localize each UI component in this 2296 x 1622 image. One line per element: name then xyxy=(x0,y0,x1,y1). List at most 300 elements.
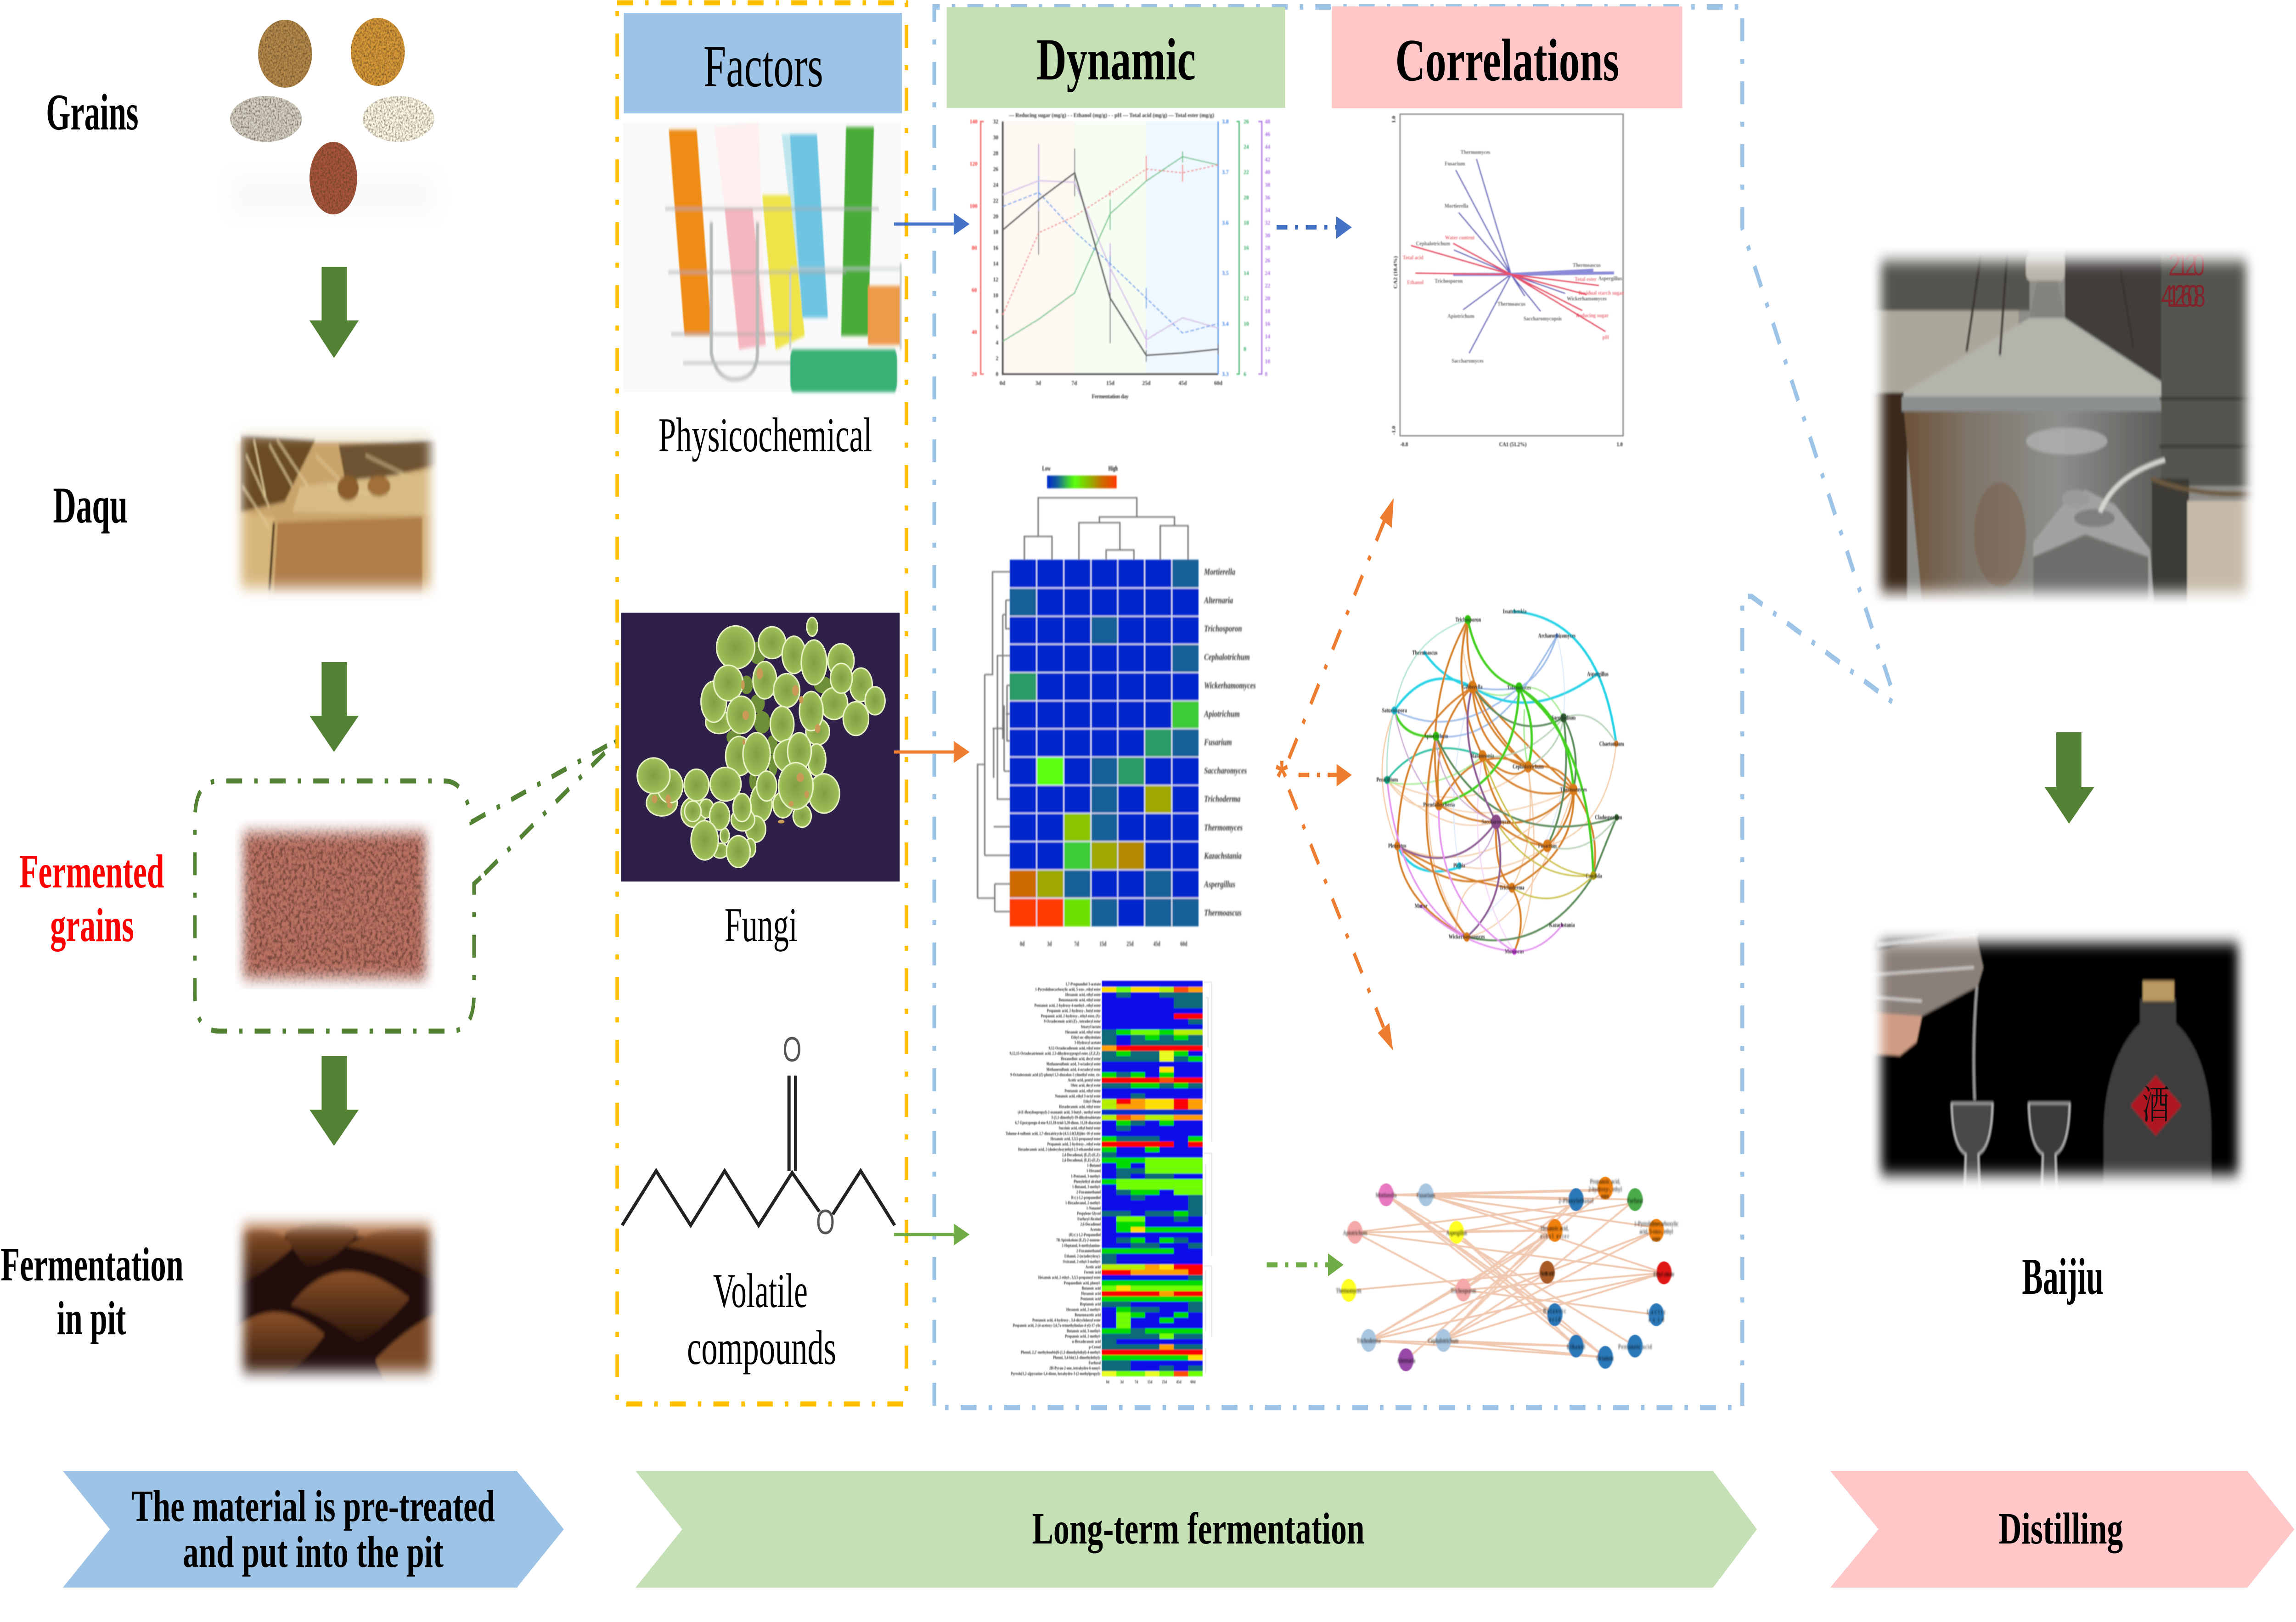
row labels: fungal genera: Mortierella xyxy=(1204,567,1235,577)
axis labels: ethanol: 80 xyxy=(972,245,977,251)
labels: vectors: Saccharomyces xyxy=(1452,358,1484,364)
axis labels: total acid xyxy=(1244,118,1249,377)
chart: volatile compounds heatmap: Pentanoic acid, 2-hydroxy-4-methyl-, ethyl ester xyxy=(1035,1003,1101,1008)
axis labels: pH: 3.6 xyxy=(1222,219,1229,226)
chart: volatile compounds heatmap: 1-Hexadecanol, 2-methyl- xyxy=(1065,1200,1101,1205)
chart: volatile compounds heatmap: Hexanoic acid, 2-ethyl-, 3,3,5-propanoyl ester xyxy=(1038,1274,1101,1280)
arrow: fungi to heatmap xyxy=(894,741,969,763)
chart: volatile compounds heatmap: 1-Hexanol xyxy=(1086,1168,1101,1173)
column labels: days: 7d xyxy=(1135,1379,1138,1385)
row labels: fungal genera: Apiotrichum xyxy=(1204,709,1240,719)
icon: ethyl hexanoate molecule: O xyxy=(783,1030,801,1069)
label: pipe serial digits: 2120 xyxy=(2168,248,2205,282)
axis labels: reducing sugar: 0 xyxy=(996,371,998,377)
heatmap cells xyxy=(1010,560,1199,926)
labels: vectors: CA2 (18.4%) xyxy=(1393,256,1398,289)
panel: raw material process column xyxy=(0,18,618,1386)
labels: vectors: Trichosporon xyxy=(1435,278,1463,284)
column labels: days: 60d xyxy=(1180,940,1187,948)
chart: volatile compounds heatmap: Stearyl lactate xyxy=(1081,1024,1101,1029)
chart: volatile compounds heatmap: 9-Octadecenoic acid (Z)-phenyl 1,3-dioxolan-2-ylmethyl ester, cis- xyxy=(1010,1072,1101,1077)
legend: low to high colour bar xyxy=(1042,465,1118,488)
chart: volatile compounds heatmap: Propanedioic acid, phenyl- xyxy=(1064,1280,1101,1285)
node labels xyxy=(1336,1178,1679,1364)
node labels: Trichoderma xyxy=(1356,1337,1381,1344)
axis labels: pH: 3.5 xyxy=(1222,270,1229,276)
node labels: Fusarium xyxy=(1538,842,1557,849)
chart: volatile compounds heatmap: Methanesulfonic acid, 3-octadecyl ester xyxy=(1047,1061,1101,1066)
row labels: fungal genera: Aspergillus xyxy=(1204,879,1235,889)
node labels: Kazachstania xyxy=(1549,921,1575,929)
axis labels: total ester: 22 xyxy=(1265,282,1270,289)
node labels: Alternaria xyxy=(1397,1357,1415,1364)
chart: volatile compounds heatmap: Succinic acid, ethyl butyl ester xyxy=(1059,1125,1101,1130)
chart: volatile compounds heatmap: Pyrrolo[1,2-a]pyrazine-1,4-dione, hexahydro-3-(2-methylpropyl)- xyxy=(1011,1371,1101,1376)
chart: volatile compounds heatmap: Furfural xyxy=(1089,1360,1101,1365)
axis labels: ethanol: 40 xyxy=(972,329,977,335)
labels: vectors: -1.0 xyxy=(1391,426,1396,435)
axis labels: total ester: 16 xyxy=(1265,320,1270,327)
panel: distilling xyxy=(1870,247,2256,1305)
frame: dynamics and correlations dash-dot border xyxy=(934,7,1898,1408)
axis labels: total ester: 10 xyxy=(1265,358,1270,365)
node labels: Aspergillus xyxy=(1587,670,1609,678)
environmental vectors xyxy=(1411,243,1606,331)
chart: volatile compounds heatmap: 2-Furanmethanol xyxy=(1076,1248,1101,1253)
chart: volatile compounds heatmap: 1-Pentanol, 3-methyl- xyxy=(1071,1173,1101,1179)
chart: volatile compounds heatmap: Acetic acid xyxy=(1086,1264,1101,1269)
x axis labels: Fermentation day xyxy=(1092,393,1129,400)
x axis labels: 60d xyxy=(1214,380,1222,386)
image: fermentation pit xyxy=(233,1210,440,1386)
chart: volatile compounds heatmap: Hexadecanoic acid, ethyl ester xyxy=(1059,1104,1101,1109)
chart: volatile compounds heatmap: p-Cresol xyxy=(1089,1344,1101,1349)
label: pipe serial digits xyxy=(2161,248,2206,314)
image: test tubes xyxy=(623,123,901,392)
axis labels: reducing sugar: 6 xyxy=(996,324,998,331)
stage banner: pre-treatment: The material is pre-treated xyxy=(132,1482,495,1531)
chart: volatile compounds heatmap: (4-E-Hexylisopropyl)-2-oxonanic acid, 3-butyl-, methyl ester xyxy=(1018,1109,1101,1115)
axis labels: total acid: 8 xyxy=(1244,346,1246,352)
node labels: Cladosporium xyxy=(1595,814,1622,821)
column labels: days: 25d xyxy=(1162,1379,1167,1385)
chart: volatile compounds heatmap: 2H-Pyran-2-one, tetrahydro-6-nonyl- xyxy=(1049,1365,1101,1371)
chart: volatile compounds heatmap: 2,6-Decadienol xyxy=(1080,1221,1101,1227)
chart: volatile compounds heatmap: 1-Pyrrolidinecarboxylic acid, 5-oxo-, ethyl ester xyxy=(1035,987,1101,992)
chart: volatile compounds heatmap: 2,4-Decadienal, (E,E)-(E,Z)- xyxy=(1062,1157,1101,1162)
axis labels: reducing sugar: 24 xyxy=(993,181,998,188)
arrow: line chart to biplot xyxy=(1277,216,1352,239)
image: fermented grains xyxy=(235,819,435,989)
axis labels: pH xyxy=(1222,118,1229,377)
heading: Dynamic xyxy=(947,7,1285,108)
label: Fermented grains: Fermented xyxy=(19,845,164,898)
axis labels: ethanol: 120 xyxy=(970,161,978,167)
chart: volatile compounds heatmap: 9,12-Octadecadienoic acid, ethyl ester xyxy=(1049,1045,1101,1050)
labels: vectors: Thermoascus xyxy=(1573,262,1601,269)
arrow: physicochemical to line chart xyxy=(894,213,969,235)
axis labels: pH: 3.7 xyxy=(1222,168,1229,175)
node labels: Ethanol xyxy=(1567,1343,1585,1350)
legend: low to high colour bar: High xyxy=(1109,465,1118,472)
labels: vectors: pH xyxy=(1603,334,1609,341)
node labels: Butanoic xyxy=(1543,1307,1566,1314)
label: Volatile compounds: Volatile xyxy=(713,1264,808,1318)
labels: vectors: Cephalotrichum xyxy=(1416,241,1450,247)
arrow: fermented grains to pit xyxy=(310,1056,359,1146)
label: Physicochemical: Physicochemical xyxy=(658,408,872,462)
chart: volatile compounds heatmap: Oxiranol, 2-ethyl-3-methyl- xyxy=(1063,1259,1101,1264)
column labels: days: 0d xyxy=(1106,1379,1109,1385)
labels: vectors: Wickerhamomyces xyxy=(1567,296,1607,302)
labels: vectors xyxy=(1391,116,1624,448)
axis labels: pH: 3.3 xyxy=(1222,371,1229,377)
chart: volatile compounds heatmap: Acetic acid, pentyl ester xyxy=(1068,1077,1101,1083)
chart legend: — Reducing sugar (mg/g) - - Ethanol (mg/g) - - pH — Total acid (mg/g) — Total ester (mg/g) xyxy=(1008,112,1214,118)
node labels: Apiotrichum xyxy=(1343,1229,1367,1236)
node labels: acid xyxy=(1649,1316,1665,1323)
chart: volatile compounds heatmap: Acetoin xyxy=(1090,1227,1101,1232)
chart: fungi heatmap xyxy=(978,465,1256,948)
axis labels: total ester: 40 xyxy=(1265,168,1270,175)
node labels: Furfural xyxy=(1627,1197,1643,1204)
x axis labels: 25d xyxy=(1142,380,1151,386)
edges xyxy=(1349,1190,1664,1360)
node labels: Trichoderma xyxy=(1499,884,1525,891)
chart: volatile compounds heatmap: Butanoic acid xyxy=(1082,1285,1101,1291)
arrows: fungi correlations fan-out: * xyxy=(1276,751,1288,803)
x axis labels xyxy=(1000,380,1222,400)
chart: volatile compounds heatmap: Propanoic acid, 2-hydroxy-, ethyl ester, (S)- xyxy=(1041,1013,1101,1018)
chart: volatile compounds heatmap: Methanesulfonic acid, 4-octadecyl ester xyxy=(1047,1066,1101,1072)
column labels: days: 45d xyxy=(1154,940,1160,948)
node labels: ester xyxy=(1652,1235,1660,1242)
node labels: Candida xyxy=(1586,872,1602,879)
column labels: days: 45d xyxy=(1176,1379,1182,1385)
arrow: grains to daqu xyxy=(310,267,359,358)
chart: volatile compounds heatmap: Heptanoic acid xyxy=(1080,1302,1101,1307)
node labels: Cephalotrichum xyxy=(1513,763,1544,770)
node labels: Ethyl oleate xyxy=(1654,1270,1675,1278)
labels: vectors: Thermomyces xyxy=(1461,149,1491,156)
axis labels: reducing sugar: 4 xyxy=(996,339,998,346)
axis labels: total ester: 34 xyxy=(1265,207,1270,213)
chart: volatile compounds heatmap: 3-Hydroxyl acetate xyxy=(1075,1040,1101,1045)
chart: volatile compounds heatmap: Propanoic acid, 2-hydroxy-, ethyl ester xyxy=(1047,1141,1101,1146)
row labels: fungal genera: Saccharomyces xyxy=(1204,765,1247,776)
chart: volatile compounds heatmap: 3-(1,1-dimethyl)-19-dihydroabietate xyxy=(1051,1115,1101,1120)
network edges xyxy=(1382,612,1617,952)
node labels: ethyl ester xyxy=(1541,1232,1569,1240)
chart: volatile compounds heatmap: Toluene-4-sulfonic acid, 2,7-dioxatricyclo-[4.3.1.0(3,8)]dec-10-yl ester xyxy=(1006,1131,1101,1136)
node labels: Hexanoic acid, xyxy=(1541,1224,1569,1232)
label: Grains: Grains xyxy=(46,84,138,140)
labels: vectors: 1.0 xyxy=(1391,116,1396,123)
chart: volatile compounds heatmap: Benzeneacetic acid xyxy=(1075,1312,1101,1317)
axis labels: reducing sugar: 2 xyxy=(996,355,998,362)
node labels: ester xyxy=(1601,1192,1609,1200)
axis labels: reducing sugar: 12 xyxy=(993,276,998,283)
chart: volatile compounds heatmap: Nonanoic acid, ethyl 3-octyl ester xyxy=(1055,1093,1101,1099)
arrow: still to baijiu xyxy=(2044,732,2094,824)
chart: volatile compounds heatmap: Pentanoic acid, 4-hydroxy-, 3,4-dicyclohexyl ester xyxy=(1032,1318,1101,1323)
node labels: Monascus xyxy=(1505,948,1524,955)
arrow: volatile compounds to heatmap xyxy=(894,1224,969,1246)
axis labels: total ester: 26 xyxy=(1265,257,1270,264)
network nodes xyxy=(1384,610,1619,955)
axis labels: total acid: 26 xyxy=(1244,118,1249,125)
chart: volatile compounds heatmap: 9,12,15-Octadecatrienoic acid, 2,3-dihydroxypropyl ester, (Z,Z,Z)- xyxy=(1010,1050,1101,1056)
label: Fungi: Fungi xyxy=(725,898,798,952)
chart: volatile compounds heatmap: Ethyl Oleate xyxy=(1083,1099,1101,1104)
axis labels: total ester: 48 xyxy=(1265,118,1270,125)
column labels: days: 7d xyxy=(1074,940,1079,948)
row labels: fungal genera: Trichoderma xyxy=(1204,794,1240,804)
chart: volatile compounds heatmap: Propylene Glycol xyxy=(1077,1211,1101,1216)
chart: volatile compounds heatmap: Phenol, 3,4-bis(1,1-dimethylethyl)- xyxy=(1053,1355,1101,1360)
axis labels: reducing sugar xyxy=(993,118,998,377)
labels: vectors: -0.8 xyxy=(1400,441,1408,448)
chart: volatile compounds heatmap: Hexanedioic acid, decyl ester xyxy=(1061,1056,1101,1061)
label: bottle character: 酒 xyxy=(2142,1083,2169,1127)
node labels: Aspergillus xyxy=(1446,1229,1467,1236)
axis labels: reducing sugar: 10 xyxy=(993,292,998,299)
chart: fungi and volatile bipartite network xyxy=(1336,1177,1679,1371)
row labels: fungal genera: Thermoascus xyxy=(1204,908,1242,918)
arrow: volatile heatmap to compound network xyxy=(1267,1253,1344,1276)
node labels: Wickerhamomyces xyxy=(1449,933,1485,940)
node labels: Lactic xyxy=(1647,1308,1666,1315)
axis labels: reducing sugar: 18 xyxy=(993,229,998,236)
axis labels: pH: 3.4 xyxy=(1222,320,1229,327)
node labels: Cephalotrichum xyxy=(1428,1337,1458,1344)
axis labels: reducing sugar: 30 xyxy=(993,134,998,141)
column labels: days: 15d xyxy=(1147,1379,1153,1385)
icon: ethyl hexanoate molecule xyxy=(622,1030,895,1241)
node labels: Rasamsonia xyxy=(1471,752,1494,759)
axis labels: total ester: 20 xyxy=(1265,295,1270,302)
node labels: Thermomyces xyxy=(1560,786,1587,793)
species vectors xyxy=(1453,159,1614,353)
axis labels: total acid: 10 xyxy=(1244,320,1249,327)
chart: volatile compounds heatmap: Hexanoic acid, ethyl ester xyxy=(1065,992,1101,997)
node labels: Gibberella xyxy=(1462,683,1482,690)
row labels: fungal genera: Alternaria xyxy=(1204,595,1233,605)
chart: volatile compounds heatmap: Hexanoic acid, 2-methyl- xyxy=(1066,1307,1101,1312)
axis labels: total ester xyxy=(1265,118,1270,377)
column labels: days: 3d xyxy=(1120,1379,1124,1385)
chart: volatile compounds heatmap: 9-Octadecenoic acid (Z)-, tetradecyl ester xyxy=(1044,1019,1101,1024)
column labels: days xyxy=(1020,940,1187,948)
chart: volatile compounds heatmap: Hexadecanoic acid, 2-(dodecyloxy)ethyl-2,3-ethanediol ester xyxy=(1018,1147,1101,1152)
column labels: days: 0d xyxy=(1020,940,1024,948)
axis labels: total ester: 24 xyxy=(1265,270,1270,276)
x axis labels: 15d xyxy=(1106,380,1114,386)
column labels: days xyxy=(1106,1379,1196,1385)
node labels: Chaetomium xyxy=(1599,740,1624,747)
heading: Correlations xyxy=(1332,6,1683,108)
labels: vectors: Total ester xyxy=(1575,276,1597,282)
node labels: Talaromyces xyxy=(1507,684,1531,691)
chart: volatile compounds heatmap: Propanoic acid, 2-(4-acetoxy-3,6,7a-trimethylindan-4-yl)-17-ylic xyxy=(1013,1323,1101,1328)
stage banner: long-term fermentation: Long-term fermentation xyxy=(1032,1504,1365,1554)
chart: volatile compounds heatmap: Phenylethyl alcohol xyxy=(1074,1179,1101,1184)
chart: volatile compounds heatmap: Propanoic acid, 2-methyl- xyxy=(1065,1333,1101,1339)
axis labels: ethanol xyxy=(970,118,978,377)
axis labels: reducing sugar: 20 xyxy=(993,213,998,219)
node labels: Octanoic xyxy=(1596,1354,1614,1362)
node labels: 1-Pyrrolidinecarboxylic xyxy=(1634,1220,1679,1227)
labels: vectors: Fusarium xyxy=(1445,161,1465,167)
node labels: Archaeorhizomyces xyxy=(1538,632,1576,639)
axis labels: total ester: 44 xyxy=(1265,144,1270,150)
axis labels: total ester: 8 xyxy=(1265,371,1267,377)
axis labels: ethanol: 100 xyxy=(970,202,978,209)
x axis labels: 45d xyxy=(1179,380,1187,386)
chart: volatile compounds heatmap: Furfuryl Alcohol xyxy=(1077,1216,1101,1221)
panel: factors xyxy=(617,3,906,1404)
heading: Dynamic: Dynamic xyxy=(1036,27,1196,93)
column labels: days: 3d xyxy=(1047,940,1052,948)
column labels: days: 15d xyxy=(1099,940,1106,948)
axis labels: total acid: 16 xyxy=(1244,245,1249,251)
chart: volatile compounds heatmap: Phenol, 2,2'-methylenebis[6-(1,1-dimethylethyl)-4-methyl- xyxy=(1021,1349,1101,1355)
node labels: Fusarium xyxy=(1417,1191,1435,1199)
node labels: Mortierella xyxy=(1376,1191,1397,1199)
label: Daqu: Daqu xyxy=(53,477,128,533)
image: five grains xyxy=(230,18,435,214)
stage banner: pre-treatment xyxy=(63,1471,564,1588)
node labels: Mucor xyxy=(1415,902,1428,909)
image: baijiu bottle and glasses xyxy=(1870,923,2252,1191)
axis labels: total ester: 28 xyxy=(1265,245,1270,251)
chart: volatile compounds heatmap: Pentanoic acid xyxy=(1080,1296,1101,1301)
labels: vectors: Thermoascus xyxy=(1497,301,1525,307)
stage banner: distilling: Distilling xyxy=(1998,1504,2123,1554)
stage banner: long-term fermentation xyxy=(636,1471,1757,1588)
label: pipe serial digits: 412608 xyxy=(2161,279,2206,314)
node labels: acid xyxy=(1549,1315,1561,1323)
chart: volatile compounds heatmap: 2-Heptanol, 6-methylamino- xyxy=(1062,1243,1101,1248)
chart: volatile compounds heatmap: Pentanoic acid, ethyl ester xyxy=(1064,1088,1101,1093)
labels: vectors: Residual starch sugar xyxy=(1579,290,1624,296)
chart: volatile compounds heatmap: Ethanol, 2-(octadecyloxy)- xyxy=(1064,1253,1101,1258)
axis labels: total ester: 30 xyxy=(1265,232,1270,239)
axis labels: reducing sugar: 16 xyxy=(993,245,998,251)
icon: ethyl hexanoate molecule: O xyxy=(816,1202,835,1241)
image: daqu straw block xyxy=(233,428,438,599)
stage banner: pre-treatment: and put into the pit xyxy=(183,1527,444,1577)
node labels: Issatchenkia xyxy=(1503,607,1526,615)
axis labels: reducing sugar: 28 xyxy=(993,150,998,157)
node labels xyxy=(1376,607,1624,955)
arrows: fungi correlations fan-out xyxy=(1276,498,1394,1050)
chart: volatile compounds heatmap: Oleic acid, decyl ester xyxy=(1071,1083,1101,1088)
axis labels: reducing sugar: 22 xyxy=(993,197,998,204)
axis labels: pH: 3.8 xyxy=(1222,118,1229,125)
node labels: Sarocladium xyxy=(1552,714,1576,721)
column labels: days: 60d xyxy=(1190,1379,1196,1385)
labels: vectors: Water content xyxy=(1445,235,1474,241)
axis labels: reducing sugar: 26 xyxy=(993,166,998,173)
node labels: Thermomyces xyxy=(1336,1287,1362,1294)
heading: Factors xyxy=(624,13,902,113)
chart: fungal co-occurrence network xyxy=(1376,607,1624,955)
chart: volatile compounds heatmap: 7R-Spiroketone (E,Z)-2-nonene- xyxy=(1056,1237,1101,1243)
labels: vectors: CA1 (51.2%) xyxy=(1499,441,1526,448)
arrow: daqu to fermented grains xyxy=(310,662,359,752)
node labels: Pichia xyxy=(1453,862,1465,869)
node labels: Trichosporon xyxy=(1451,1287,1476,1294)
chart: volatile compounds heatmap: 2,4-Decadienal, (E,Z)-(E,Z)- xyxy=(1062,1152,1101,1157)
node labels: Pleurotus xyxy=(1388,842,1407,849)
labels: vectors: Apiotrichum xyxy=(1447,313,1474,320)
node labels: Penicillium xyxy=(1376,776,1398,783)
chart: volatile compounds heatmap: Hexanoic acid xyxy=(1081,1291,1101,1296)
axis labels: total acid: 20 xyxy=(1244,194,1249,201)
axis labels: reducing sugar: 14 xyxy=(993,260,998,267)
heading: Factors: Factors xyxy=(703,34,823,100)
chart: volatile compounds heatmap: Benzenoacetic acid, ethyl ester xyxy=(1058,997,1101,1002)
chart: volatile compounds heatmap: n-Hexadecanoic acid xyxy=(1072,1339,1101,1344)
axis labels: total acid: 24 xyxy=(1244,144,1249,150)
node labels: Propanoic acid, xyxy=(1590,1178,1621,1185)
chart: volatile compounds heatmap: 2-Furanmethanol xyxy=(1076,1189,1101,1195)
dendrogram: columns and rows xyxy=(978,498,1188,912)
labels: vectors: 1.0 xyxy=(1617,441,1623,448)
label: Fermentation in pit: in pit xyxy=(57,1292,126,1345)
axis labels: total ester: 14 xyxy=(1265,333,1270,340)
chart: volatile compounds heatmap: 1-Nonanol xyxy=(1086,1205,1101,1211)
row labels: fungal genera: Wickerhamomyces xyxy=(1204,680,1256,690)
node labels: Pentanoic acid xyxy=(1618,1343,1652,1350)
chart: volatile compounds heatmap xyxy=(1006,981,1212,1385)
chart: volatile compounds heatmap: 1,7-Pregnandiol 3-acetate xyxy=(1065,981,1101,987)
chart: volatile compounds heatmap: Butanoic acid, 3-methyl- xyxy=(1067,1328,1101,1333)
labels: vectors: Mortierella xyxy=(1445,203,1469,209)
labels: vectors: Reducing sugar xyxy=(1576,312,1609,319)
chart: volatile compounds heatmap: Hexanoic acid, 3,3,5-propanoyl ester xyxy=(1050,1136,1101,1141)
labels: vectors: Ethanol xyxy=(1407,279,1424,286)
labels: vectors: Aspergillus xyxy=(1598,275,1622,282)
axis labels: ethanol: 140 xyxy=(970,118,978,125)
chart: volatile compounds heatmap: Ethyl sec-dihydrolate xyxy=(1071,1034,1101,1040)
column labels: days: 25d xyxy=(1126,940,1134,948)
x axis labels: 0d xyxy=(1000,380,1005,386)
node labels: Pseudallescheria xyxy=(1423,801,1455,808)
node labels: acid, 5-oxo-, ethyl xyxy=(1639,1228,1673,1235)
axis labels: ethanol: 20 xyxy=(972,371,977,377)
row labels: fungal genera: Fusarium xyxy=(1204,737,1232,747)
axis labels: total ester: 36 xyxy=(1265,194,1270,201)
row labels: fungal genera: Kazachstania xyxy=(1204,851,1242,861)
row labels: fungal genera xyxy=(1204,567,1256,918)
node labels: 2-hydroxy-, ethyl xyxy=(1588,1185,1622,1193)
callout: dash-dot frame around fermented grains xyxy=(195,740,618,1031)
stage banner: distilling xyxy=(1830,1471,2295,1588)
label: Fermented grains: grains xyxy=(50,899,134,952)
node labels: Trichosporon xyxy=(1455,616,1481,623)
axis labels: total ester: 38 xyxy=(1265,181,1270,188)
node labels: 2-Phenylethanol xyxy=(1559,1197,1593,1204)
chart: volatile compounds heatmap: Hexanoic acid, ethyl ester xyxy=(1065,1029,1101,1034)
x axis labels: 7d xyxy=(1071,380,1077,386)
axis labels: total acid: 12 xyxy=(1244,295,1249,302)
node labels: Saturnispora xyxy=(1382,707,1407,714)
node labels: Apiotrichum xyxy=(1424,732,1448,740)
label: Volatile compounds: compounds xyxy=(687,1321,836,1375)
label: Fermentation in pit: Fermentation xyxy=(0,1238,184,1291)
